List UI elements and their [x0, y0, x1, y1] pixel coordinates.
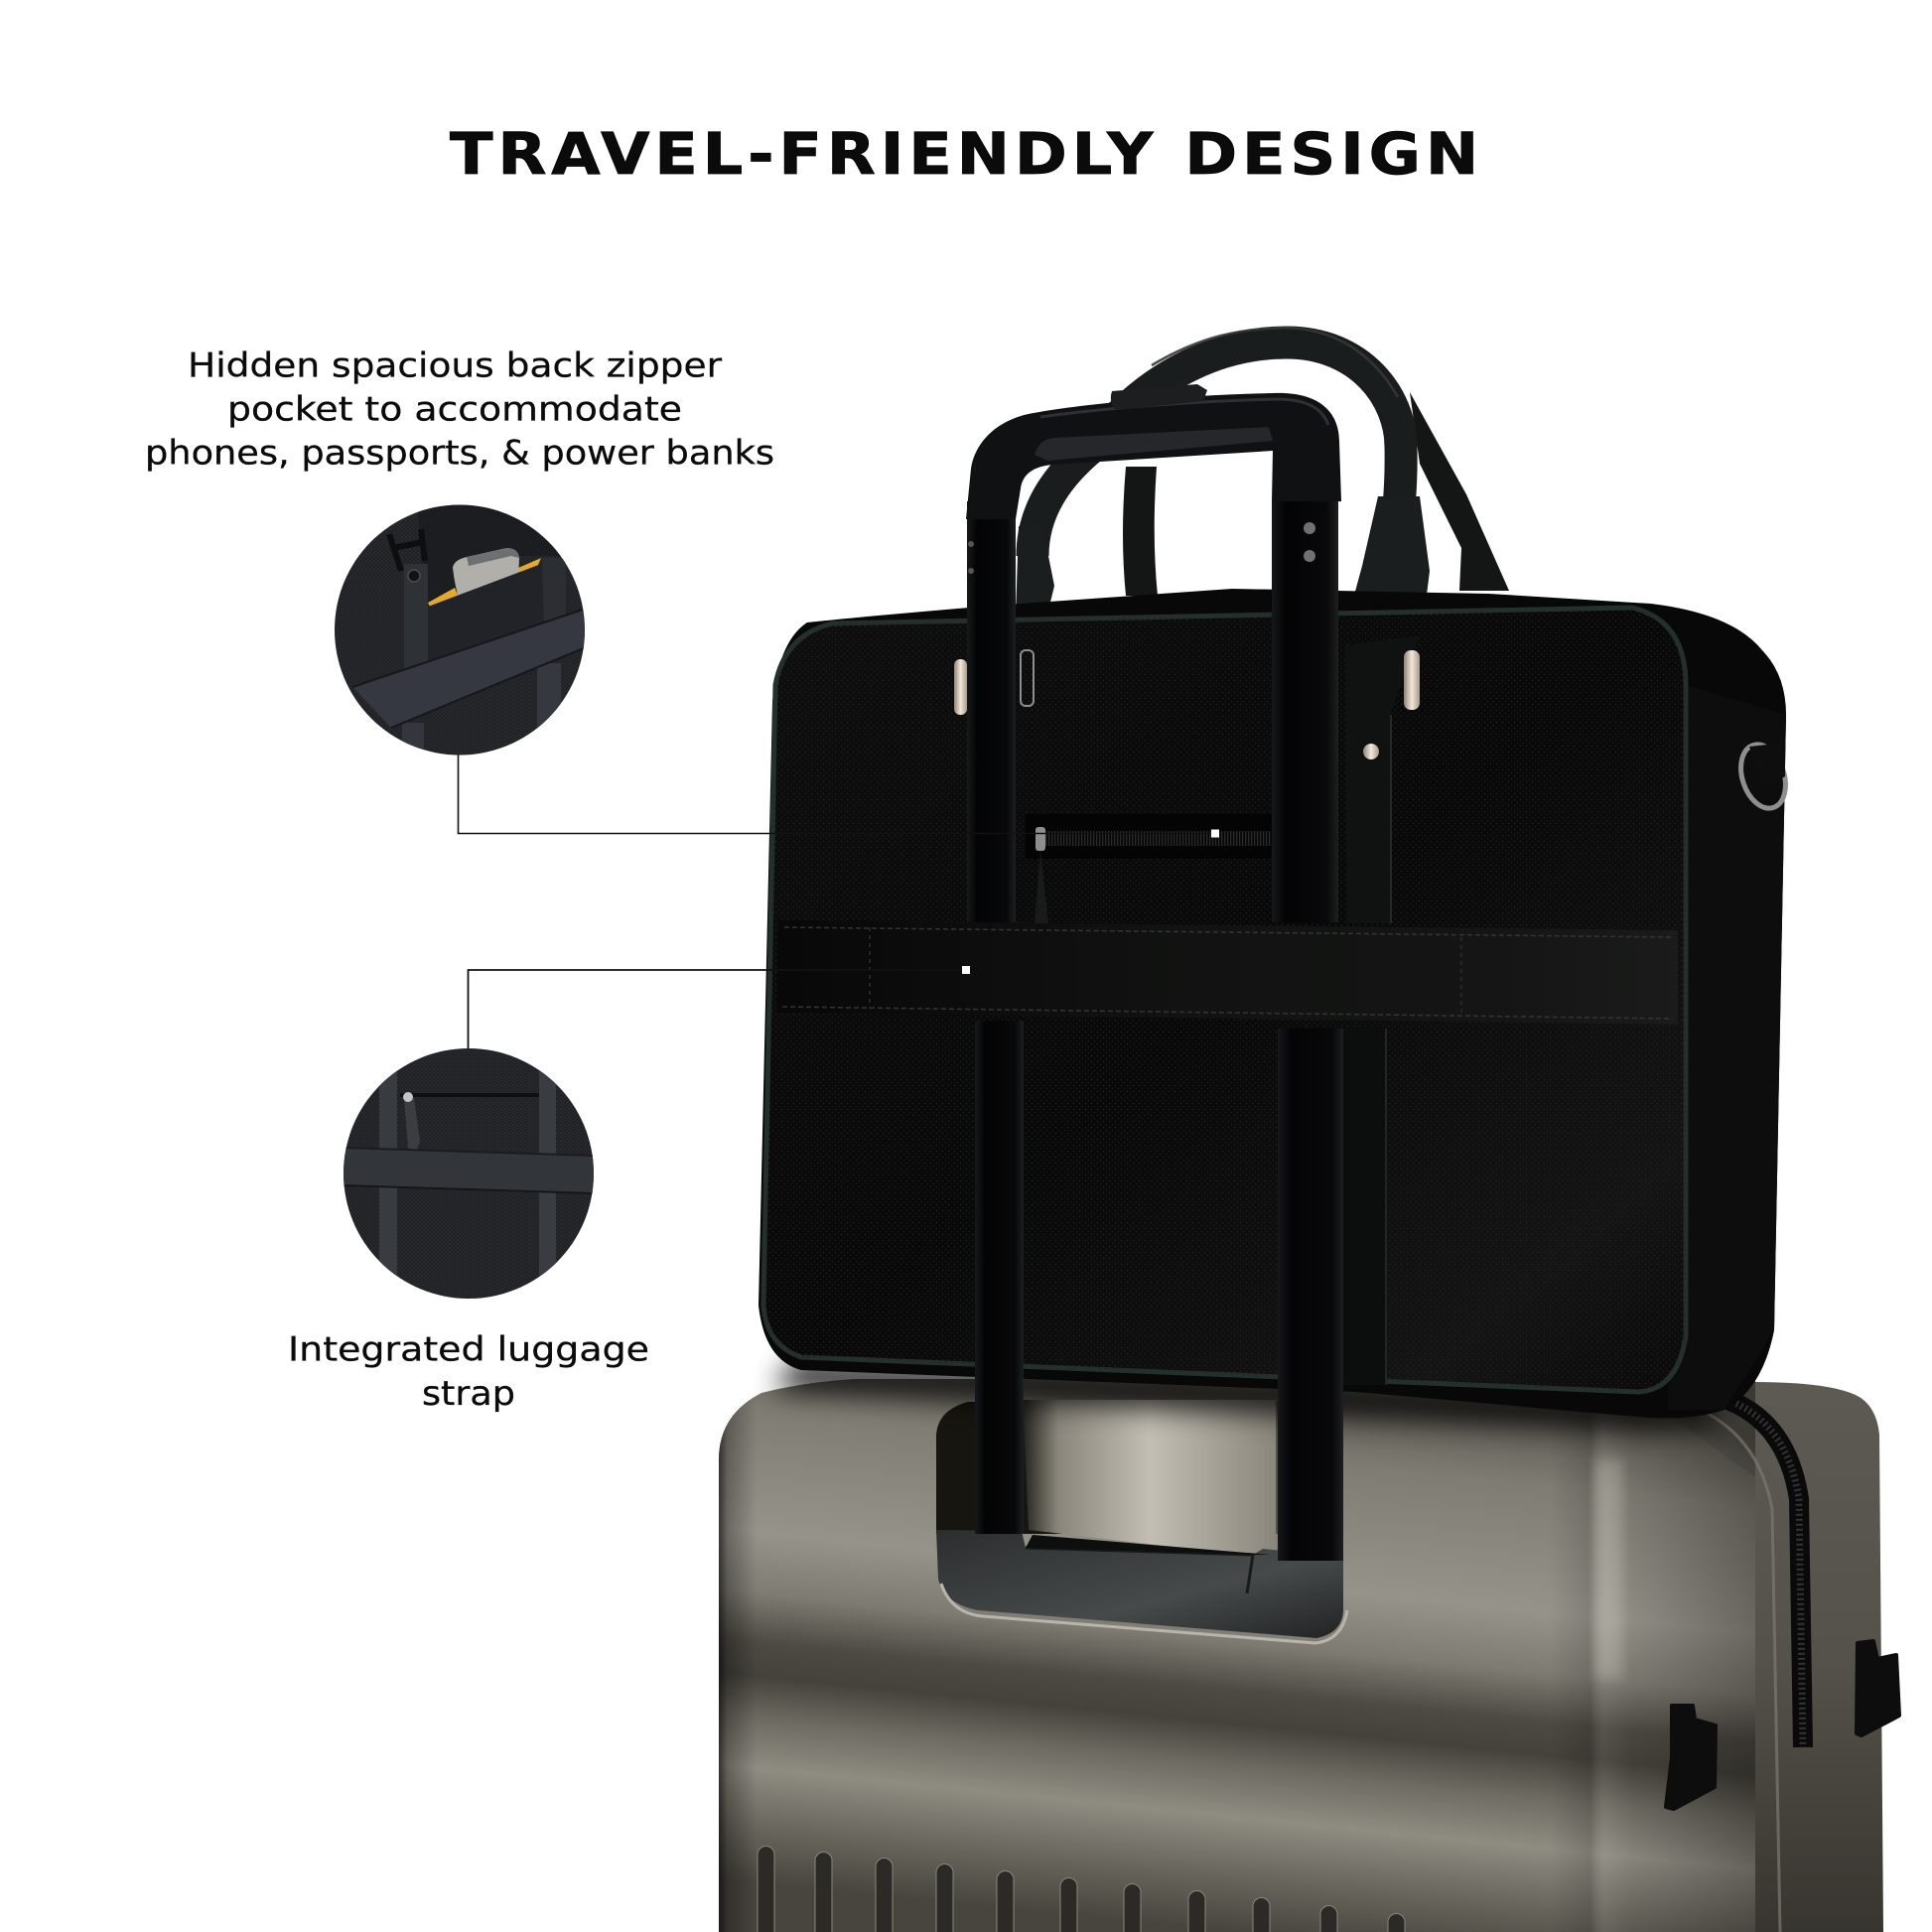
telescopic luggage handle — [966, 384, 1343, 1561]
text block: back zipper pocket caption: pocket to accommodate — [227, 389, 682, 429]
marker: zipper point — [1211, 830, 1219, 838]
hardware — [954, 650, 1793, 814]
bag and luggage photo illustration — [715, 328, 1899, 1932]
suitcase side handles — [1666, 1641, 1899, 1809]
text block: back zipper pocket caption: phones, passports, & power banks — [145, 433, 774, 473]
handle recess in suitcase — [936, 1400, 1347, 1643]
rear bag handle — [1123, 392, 1509, 596]
luggage ridges — [758, 1847, 1405, 1932]
text block: luggage strap caption: strap — [422, 1374, 515, 1414]
marker: strap point — [962, 966, 970, 974]
connector line: zipper pocket — [459, 755, 1215, 834]
hidden back zipper — [1026, 814, 1274, 923]
text block: luggage strap caption: Integrated luggage — [288, 1330, 649, 1370]
handle top button — [1111, 384, 1207, 410]
suitcase zipper — [1723, 1398, 1803, 1747]
handle grip — [966, 393, 1341, 519]
telescopic handle mount — [936, 1530, 1343, 1638]
callout circle: back zipper pocket close-up — [335, 504, 586, 757]
text block: back zipper pocket caption: Hidden spacious back zipper — [188, 345, 722, 385]
suitcase side panel — [1688, 1382, 1883, 1932]
text block: back zipper pocket caption — [145, 345, 774, 473]
icon: phone in pocket — [428, 548, 541, 609]
bag front panel — [763, 608, 1686, 1392]
bag shadow on suitcase — [774, 1360, 1718, 1430]
title: TRAVEL-FRIENDLY DESIGN — [450, 121, 1478, 188]
suitcase front shell — [715, 1370, 1767, 1932]
integrated luggage strap — [776, 920, 1678, 1025]
text block: luggage strap caption — [288, 1330, 649, 1414]
connector line: luggage strap — [469, 970, 966, 1048]
bag body — [759, 589, 1786, 1418]
bag strap right — [1345, 635, 1420, 923]
callout circle: luggage strap close-up — [343, 1047, 595, 1300]
front bag handle — [1015, 328, 1430, 655]
